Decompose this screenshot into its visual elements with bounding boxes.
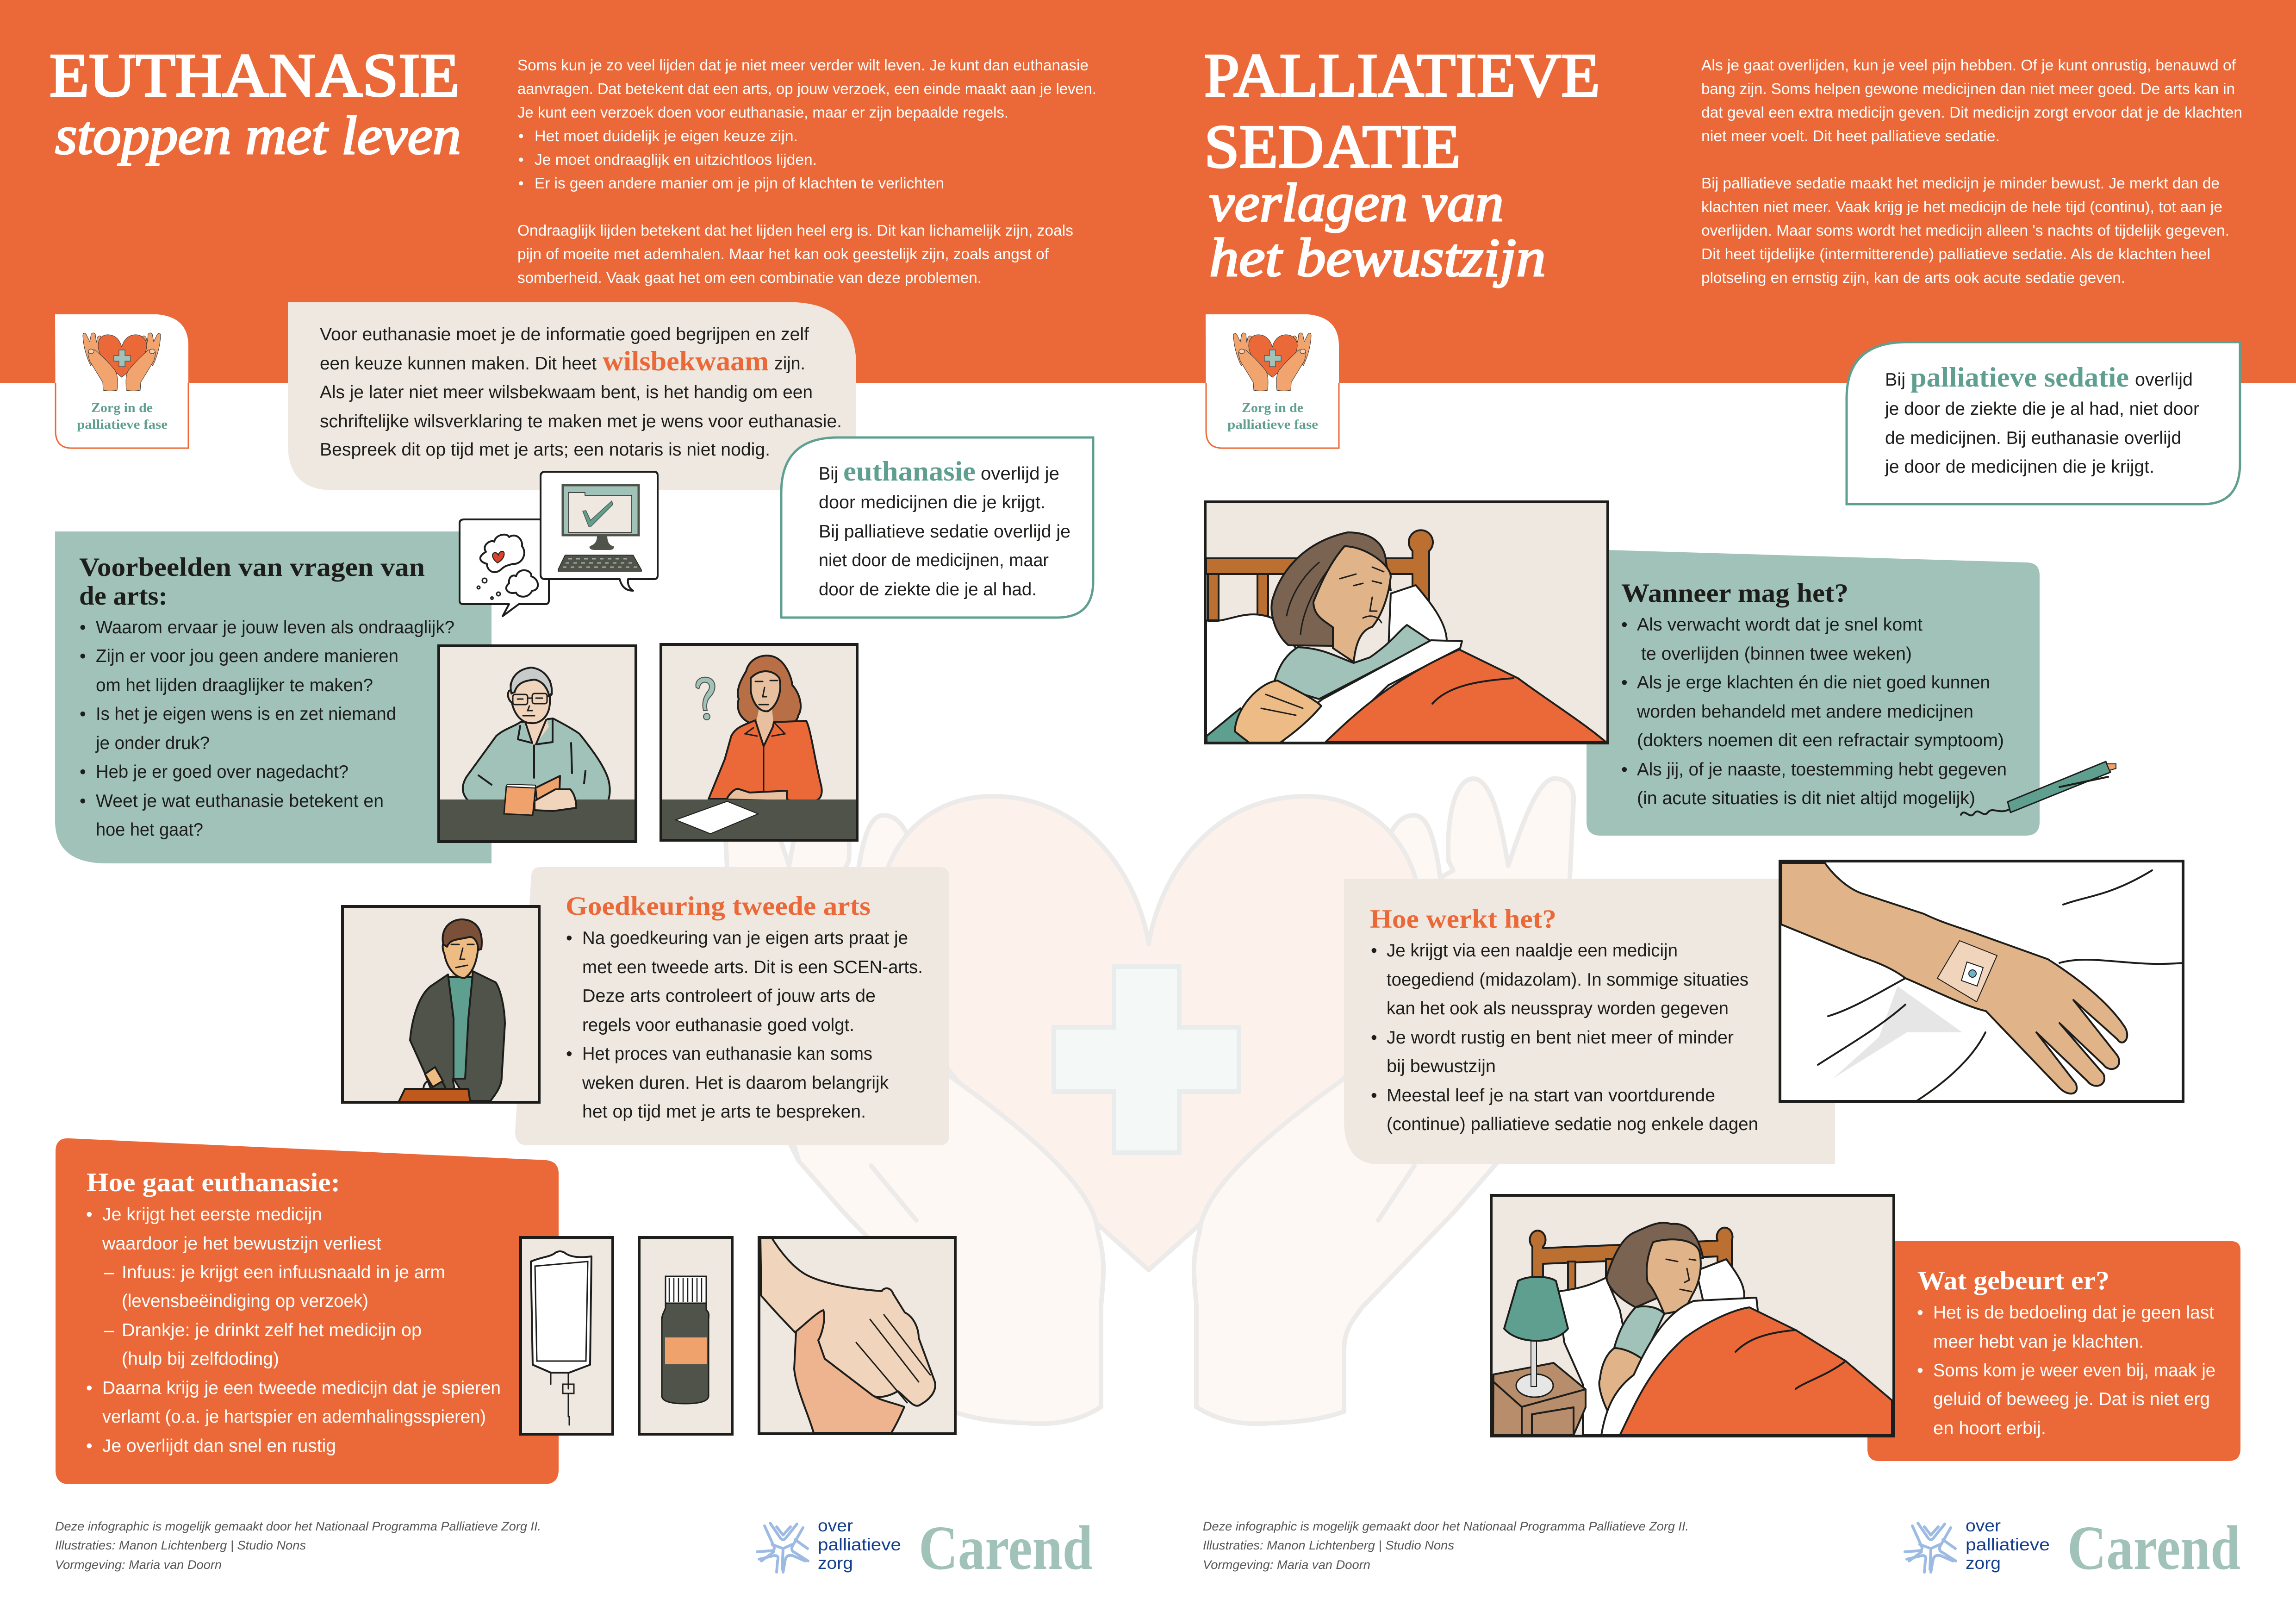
title: euthanasie: stoppen met leven [55, 105, 461, 166]
panel: voorbeelden van vragen [55, 531, 492, 863]
panel: goedkeuring tweede arts: Na goedkeuring van je eigen arts praat je [582, 928, 908, 948]
panel: wat gebeurt er: Het is de bedoeling dat je geen last [1933, 1303, 2214, 1323]
callout: bij palliatieve sedatie: overlijd [2135, 370, 2193, 390]
panel: hoe werkt het: • [1371, 1086, 1377, 1106]
title: palliatieve sedatie: verlagen van [1209, 172, 1504, 233]
logo card left: zorg in de palliatieve fase: Zorg in de [91, 400, 153, 415]
panel: wat gebeurt er: geluid of beweeg je. Dat is niet erg [1933, 1389, 2210, 1409]
illustration: doctor with bag [342, 906, 539, 1102]
logos right: over palliatieve zorg and carend [1905, 1513, 2240, 1583]
panel: hoe gaat euthanasie: Je krijgt het eerste medicijn [102, 1205, 322, 1224]
panel: voorbeelden van vragen: de arts: [79, 581, 168, 611]
footer credits right: Deze infographic is mogelijk gemaakt door het Nationaal Programma Palliatieve Zorg II. [1203, 1519, 1689, 1533]
panel: wanneer mag het: • [1621, 760, 1628, 780]
logos left: over palliatieve zorg and carend: Carend [919, 1513, 1093, 1583]
callout: bij euthanasie: Bij [819, 464, 838, 484]
intro text: palliatieve sedatie: bang zijn. Soms helpen gewone medicijnen dan niet meer goed. De arts kan in [1701, 80, 2235, 97]
footer credits left [55, 1519, 541, 1572]
panel: voorbeelden van vragen: hoe het gaat? [96, 820, 203, 840]
intro text: euthanasie: somberheid. Vaak gaat het om een combinatie van deze problemen. [517, 269, 982, 286]
panel: wanneer mag het: Als jij, of je naaste, toestemming hebt gegeven [1637, 760, 2007, 780]
logos left: over palliatieve zorg and carend: palliatieve [818, 1535, 901, 1554]
panel: voorbeelden van vragen: Heb je er goed over nagedacht? [96, 762, 348, 782]
illustration: older man with book [439, 646, 636, 842]
panel: goedkeuring tweede arts: weken duren. Het is daarom belangrijk [582, 1073, 889, 1093]
panel: hoe werkt het: Je wordt rustig en bent niet meer of minder [1387, 1028, 1734, 1048]
logos left: over palliatieve zorg and carend [757, 1513, 1093, 1583]
callout: bij palliatieve sedatie: palliatieve sedatie [1910, 362, 2129, 393]
panel: hoe gaat euthanasie: – [104, 1262, 114, 1282]
illustration: woman sleeping in bed with lamp [1491, 1195, 1894, 1436]
panel: wat gebeurt er: Wat gebeurt er? [1917, 1266, 2109, 1295]
footer credits left: Deze infographic is mogelijk gemaakt door het Nationaal Programma Palliatieve Zorg II. [55, 1519, 541, 1533]
icon: thought bubble card [460, 519, 549, 616]
panel: wilsbekwaam: zijn. [774, 354, 805, 374]
intro text: euthanasie: Er is geen andere manier om je pijn of klachten te verlichten [535, 175, 944, 192]
title: palliatieve sedatie: SEDATIE [1204, 112, 1461, 181]
panel: hoe werkt het: toegediend (midazolam). In sommige situaties [1387, 970, 1748, 990]
intro text: euthanasie: pijn of moeite met ademhalen. Maar het kan ook geestelijk zijn, zoals angst of [517, 245, 1049, 262]
panel: voorbeelden van vragen: • [80, 704, 86, 724]
panel: wilsbekwaam: wilsbekwaam [603, 346, 769, 376]
panel: wanneer mag het: • [1621, 615, 1628, 635]
panel: hoe gaat euthanasie: – [104, 1320, 114, 1340]
intro text: palliatieve sedatie: Als je gaat overlijden, kun je veel pijn hebben. Of je kunt onrustig, benauwd of [1701, 56, 2236, 74]
illustration: hand with infusion patch [1780, 861, 2183, 1101]
callout: bij euthanasie: door de ziekte die je al had. [819, 580, 1037, 600]
intro text: palliatieve sedatie: niet meer voelt. Dit heet palliatieve sedatie. [1701, 127, 2000, 144]
logos left: over palliatieve zorg and carend: over [818, 1516, 853, 1535]
callout: bij euthanasie [781, 437, 1093, 618]
intro text: euthanasie [517, 56, 1096, 286]
panel: goedkeuring tweede arts: regels voor euthanasie goed volgt. [582, 1015, 854, 1035]
panel: voorbeelden van vragen: • [80, 646, 86, 666]
footer credits right [1203, 1519, 1689, 1572]
logos right: over palliatieve zorg and carend: zorg [1966, 1554, 2001, 1573]
panel: voorbeelden van vragen: Weet je wat euthanasie betekent en [96, 791, 384, 811]
panel: hoe werkt het: Je krijgt via een naaldje een medicijn [1387, 941, 1678, 961]
callout: bij euthanasie: overlijd je [981, 464, 1059, 484]
callout: bij euthanasie: niet door de medicijnen, maar [819, 550, 1049, 570]
intro text: euthanasie: Je moet ondraaglijk en uitzichtloos lijden. [535, 151, 817, 168]
callout: bij euthanasie: euthanasie [843, 456, 976, 487]
intro text: palliatieve sedatie: overlijden. Maar soms wordt het medicijn alleen 's nachts of tijdelijk gegeven. [1701, 222, 2229, 239]
title: palliatieve sedatie [1204, 41, 1600, 288]
panel: wanneer mag het: Wanneer mag het? [1621, 579, 1848, 608]
intro text: palliatieve sedatie: plotseling en ernstig zijn, kan de arts ook acute sedatie geven. [1701, 269, 2125, 286]
panel: hoe gaat euthanasie: (levensbeëindiging op verzoek) [122, 1291, 368, 1311]
panel: wanneer mag het: Als verwacht wordt dat je snel komt [1637, 615, 1923, 635]
panel: hoe werkt het: kan het ook als neusspray worden gegeven [1387, 999, 1729, 1018]
panel: hoe gaat euthanasie: Infuus: je krijgt een infuusnaald in je arm [122, 1262, 445, 1282]
logo card left: zorg in de palliatieve fase [55, 314, 188, 448]
intro text: euthanasie: • [518, 127, 524, 144]
logo card right: zorg in de palliatieve fase [1206, 314, 1339, 448]
panel: goedkeuring tweede arts: Het proces van euthanasie kan soms [582, 1044, 872, 1064]
panel: wilsbekwaam [288, 302, 856, 490]
callout: bij euthanasie: door medicijnen die je krijgt. [819, 493, 1045, 512]
orange header band [0, 0, 2296, 383]
panel: hoe werkt het: (continue) palliatieve sedatie nog enkele dagen [1387, 1114, 1758, 1134]
title: palliatieve sedatie: PALLIATIEVE [1204, 41, 1600, 109]
illustration: medicine bottle [639, 1237, 732, 1434]
footer credits right: Illustraties: Manon Lichtenberg | Studio Nons [1203, 1538, 1454, 1552]
panel: hoe werkt het: Meestal leef je na start van voortdurende [1387, 1086, 1715, 1106]
illustration: woman with paper and question mark [661, 644, 857, 840]
panel: hoe gaat euthanasie: • [86, 1205, 93, 1224]
intro text: palliatieve sedatie: Dit heet tijdelijke (intermitterende) palliatieve sedatie. Als de klachten heel [1701, 245, 2210, 262]
panel: hoe werkt het: • [1371, 1028, 1377, 1048]
panel: hoe werkt het: Hoe werkt het? [1370, 905, 1556, 934]
logo card right: zorg in de palliatieve fase: palliatieve fase [1227, 417, 1318, 432]
intro text: euthanasie: Het moet duidelijk je eigen keuze zijn. [535, 127, 798, 144]
panel: hoe gaat euthanasie: Je overlijdt dan snel en rustig [102, 1436, 336, 1456]
callout: bij euthanasie: Bij palliatieve sedatie overlijd je [819, 522, 1070, 542]
panel: voorbeelden van vragen: Waarom ervaar je jouw leven als ondraaglijk? [96, 618, 454, 637]
logos right: over palliatieve zorg and carend: over [1966, 1516, 2001, 1535]
intro text: euthanasie: Soms kun je zo veel lijden dat je niet meer verder wilt leven. Je kunt dan euthanasie [517, 56, 1089, 74]
panel: goedkeuring tweede arts: Goedkeuring tweede arts [566, 892, 871, 921]
panel: wat gebeurt er: meer hebt van je klachten. [1933, 1332, 2144, 1352]
panel: hoe gaat euthanasie: Drankje: je drinkt zelf het medicijn op [122, 1320, 422, 1340]
panel: wanneer mag het: • [1621, 673, 1628, 693]
panel: voorbeelden van vragen: Is het je eigen wens is en zet niemand [96, 704, 396, 724]
panel: hoe gaat euthanasie [56, 1138, 559, 1484]
panel: goedkeuring tweede arts: • [566, 1044, 572, 1064]
footer credits left: Vormgeving: Maria van Doorn [55, 1558, 222, 1572]
illustration: infusion bag [521, 1237, 613, 1434]
intro text: palliatieve sedatie [1701, 56, 2242, 286]
illustration: holding hands [759, 1237, 955, 1434]
panel: hoe gaat euthanasie: Daarna krijg je een tweede medicijn dat je spieren [102, 1378, 501, 1398]
panel: goedkeuring tweede arts: het op tijd met je arts te bespreken. [582, 1102, 866, 1122]
panel: wilsbekwaam: Als je later niet meer wilsbekwaam bent, is het handig om een [320, 382, 813, 402]
logos right: over palliatieve zorg and carend: palliatieve [1966, 1535, 2050, 1554]
panel: hoe werkt het [1344, 879, 1835, 1164]
panel: goedkeuring tweede arts: • [566, 928, 572, 948]
logo card left: zorg in de palliatieve fase: palliatieve fase [77, 417, 168, 432]
icon: pen with squiggle [1961, 762, 2116, 815]
panel: voorbeelden van vragen: Voorbeelden van vragen van [79, 553, 425, 582]
panel: voorbeelden van vragen: • [80, 762, 86, 782]
panel: hoe gaat euthanasie: waardoor je het bewustzijn verliest [102, 1234, 381, 1254]
panel: goedkeuring tweede arts: Deze arts controleert of jouw arts de [582, 986, 876, 1006]
intro text: euthanasie: Ondraaglijk lijden betekent dat het lijden heel erg is. Dit kan lichamelijk zijn, zoals [517, 222, 1073, 239]
panel: voorbeelden van vragen: om het lijden draaglijker te maken? [96, 675, 373, 695]
panel: wanneer mag het: (in acute situaties is dit niet altijd mogelijk) [1637, 788, 1975, 808]
panel: wat gebeurt er: • [1917, 1361, 1923, 1380]
callout: bij palliatieve sedatie: Bij [1885, 370, 1905, 390]
panel: hoe werkt het: bij bewustzijn [1387, 1056, 1496, 1076]
footer credits left: Illustraties: Manon Lichtenberg | Studio Nons [55, 1538, 306, 1552]
title: palliatieve sedatie: het bewustzijn [1209, 227, 1546, 288]
panel: wat gebeurt er: en hoort erbij. [1933, 1418, 2046, 1438]
panel: voorbeelden van vragen: je onder druk? [95, 733, 210, 753]
icon: computer card [541, 472, 658, 591]
panel: voorbeelden van vragen: Zijn er voor jou geen andere manieren [96, 646, 398, 666]
panel: hoe gaat euthanasie: verlamt (o.a. je hartspier en ademhalingsspieren) [102, 1407, 486, 1427]
intro text: palliatieve sedatie: dat geval een extra medicijn geven. Dit medicijn zorgt ervoor dat je de klachten [1701, 104, 2242, 121]
panel: wilsbekwaam: Bespreek dit op tijd met je arts; een notaris is niet nodig. [320, 440, 770, 460]
background illustration: heart held by two hands [724, 779, 1574, 1424]
panel: hoe gaat euthanasie: (hulp bij zelfdoding) [122, 1349, 279, 1369]
intro text: euthanasie: aanvragen. Dat betekent dat een arts, op jouw verzoek, een einde maakt aan je leven. [517, 80, 1096, 97]
panel: voorbeelden van vragen: • [80, 791, 86, 811]
logos right: over palliatieve zorg and carend: Carend [2067, 1513, 2240, 1583]
panel: wat gebeurt er: Soms kom je weer even bij, maak je [1933, 1361, 2215, 1380]
panel: wanneer mag het [1587, 550, 2040, 836]
panel: wilsbekwaam: schriftelijke wilsverklaring te maken met je wens voor euthanasie. [320, 412, 842, 431]
callout: bij palliatieve sedatie [1847, 342, 2240, 504]
title: euthanasie [50, 41, 461, 166]
illustration: woman awake in bed [1205, 502, 1608, 743]
intro text: euthanasie: • [518, 151, 524, 168]
callout: bij palliatieve sedatie: je door de medicijnen die je krijgt. [1885, 457, 2154, 477]
intro text: euthanasie: Je kunt een verzoek doen voor euthanasie, maar er zijn bepaalde regels. [517, 104, 1008, 121]
callout: bij palliatieve sedatie: je door de ziekte die je al had, niet door [1885, 399, 2199, 419]
panel: voorbeelden van vragen: • [80, 618, 86, 637]
panel: wilsbekwaam: een keuze kunnen maken. Dit heet [320, 354, 597, 374]
panel: wanneer mag het: worden behandeld met andere medicijnen [1636, 702, 1973, 722]
intro text: palliatieve sedatie: klachten niet meer. Vaak krijg je het medicijn de hele tijd (continu), tot aan je [1701, 198, 2222, 215]
panel: wanneer mag het: te overlijden (binnen twee weken) [1641, 644, 1912, 664]
intro text: palliatieve sedatie: Bij palliatieve sedatie maakt het medicijn je minder bewust. Je merkt dan de [1701, 175, 2220, 192]
panel: wanneer mag het: Als je erge klachten én die niet goed kunnen [1637, 673, 1990, 693]
panel: wilsbekwaam: Voor euthanasie moet je de informatie goed begrijpen en zelf [320, 325, 809, 344]
panel: hoe gaat euthanasie: Hoe gaat euthanasie: [87, 1168, 340, 1197]
panel: goedkeuring tweede arts [515, 867, 949, 1145]
panel: goedkeuring tweede arts: met een tweede arts. Dit is een SCEN-arts. [582, 957, 923, 977]
logos left: over palliatieve zorg and carend: zorg [818, 1554, 853, 1573]
panel: wat gebeurt er: • [1917, 1303, 1923, 1323]
footer credits right: Vormgeving: Maria van Doorn [1203, 1558, 1370, 1572]
panel: wanneer mag het: (dokters noemen dit een refractair symptoom) [1637, 731, 2004, 750]
logo card right: zorg in de palliatieve fase: Zorg in de [1242, 400, 1303, 415]
panel: wat gebeurt er [1867, 1241, 2240, 1461]
intro text: euthanasie: • [518, 175, 524, 192]
title: euthanasie: EUTHANASIE [50, 41, 460, 109]
panel: hoe gaat euthanasie: • [86, 1436, 93, 1456]
panel: hoe werkt het: • [1371, 941, 1377, 961]
panel: hoe gaat euthanasie: • [86, 1378, 93, 1398]
callout: bij palliatieve sedatie: de medicijnen. Bij euthanasie overlijd [1885, 428, 2181, 448]
